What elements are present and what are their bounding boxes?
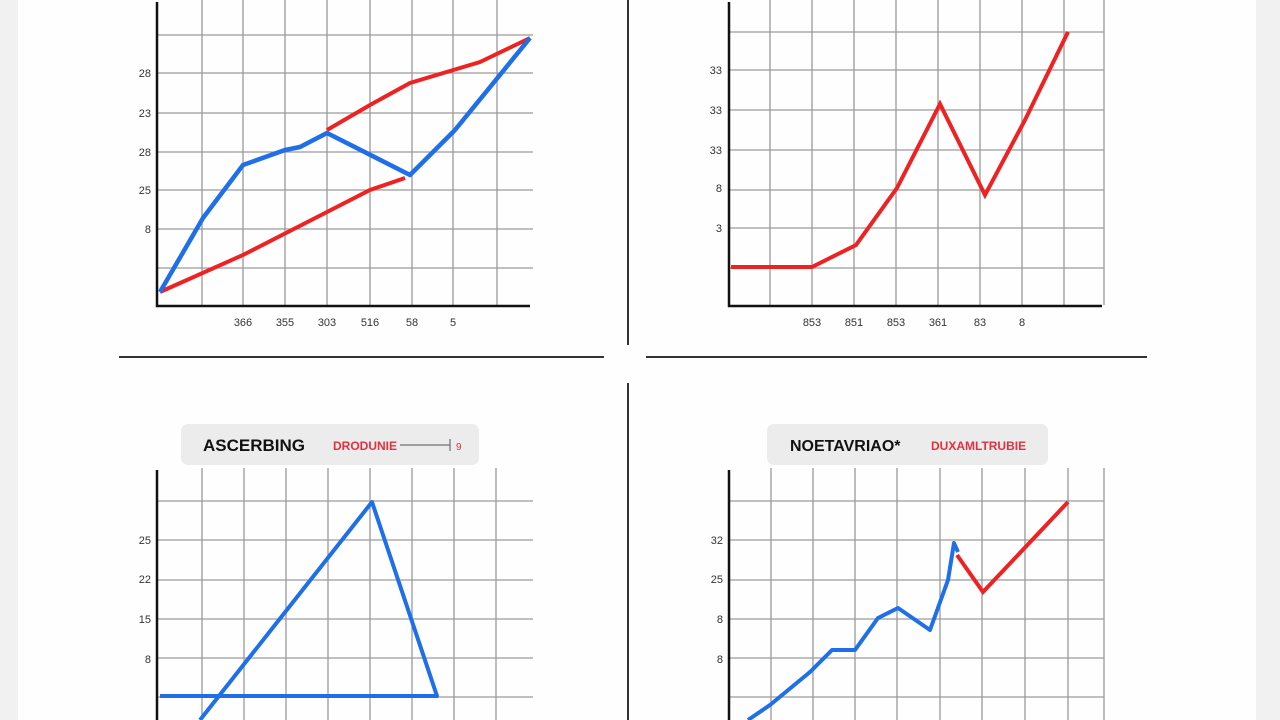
chart 1: ascending comparison: 25 xyxy=(139,185,151,197)
chart 2: red volatile: 33 xyxy=(710,65,722,77)
chart 3: ascending triangle: 15 xyxy=(139,614,151,626)
chart 1: ascending comparison: 58 xyxy=(406,317,418,329)
chart 2: red volatile: 851 xyxy=(845,317,863,329)
label: ascending xyxy=(181,424,479,465)
chart 2: red volatile: 8 xyxy=(716,183,722,195)
label: notavriao: NOETAVRIAO* xyxy=(790,438,901,455)
chart 2: red volatile: 33 xyxy=(710,145,722,157)
chart 2: red volatile: 853 xyxy=(803,317,821,329)
chart 1: ascending comparison: 303 xyxy=(318,317,336,329)
chart 2: red volatile: 33 xyxy=(710,105,722,117)
chart 2: red volatile xyxy=(710,0,1104,329)
chart 2: red volatile: 3 xyxy=(716,223,722,235)
chart 2: red volatile: 8 xyxy=(1019,317,1025,329)
chart 3: ascending triangle xyxy=(139,424,533,720)
chart 1: ascending comparison: 366 xyxy=(234,317,252,329)
chart 3: ascending triangle: 8 xyxy=(145,654,151,666)
chart 4: mixed trend: 8 xyxy=(717,614,723,626)
chart 1: ascending comparison xyxy=(139,0,533,329)
chart 4: mixed trend: 25 xyxy=(711,574,723,586)
label: ascending: ASCERBING xyxy=(203,436,305,455)
chart 1: ascending comparison: 28 xyxy=(139,147,151,159)
chart 3: ascending triangle: 22 xyxy=(139,574,151,586)
chart 4: mixed trend: 8 xyxy=(717,654,723,666)
chart 3: ascending triangle: 25 xyxy=(139,535,151,547)
label: notavriao xyxy=(767,424,1048,465)
chart 4: mixed trend: 32 xyxy=(711,535,723,547)
chart 1: ascending comparison: 8 xyxy=(145,224,151,236)
chart 1: ascending comparison: 355 xyxy=(276,317,294,329)
chart 1: ascending comparison: 5 xyxy=(450,317,456,329)
chart 1: ascending comparison: 23 xyxy=(139,108,151,120)
chart 1: ascending comparison: 28 xyxy=(139,68,151,80)
label: notavriao: DUXAMLTRUBIE xyxy=(931,439,1026,453)
chart 2: red volatile: 361 xyxy=(929,317,947,329)
label: ascending: DRODUNIE xyxy=(333,439,397,453)
chart 4: mixed trend xyxy=(711,424,1104,720)
label: ascending: 9 xyxy=(456,442,462,453)
chart 2: red volatile: 853 xyxy=(887,317,905,329)
chart 2: red volatile: 83 xyxy=(974,317,986,329)
chart 1: ascending comparison: 516 xyxy=(361,317,379,329)
